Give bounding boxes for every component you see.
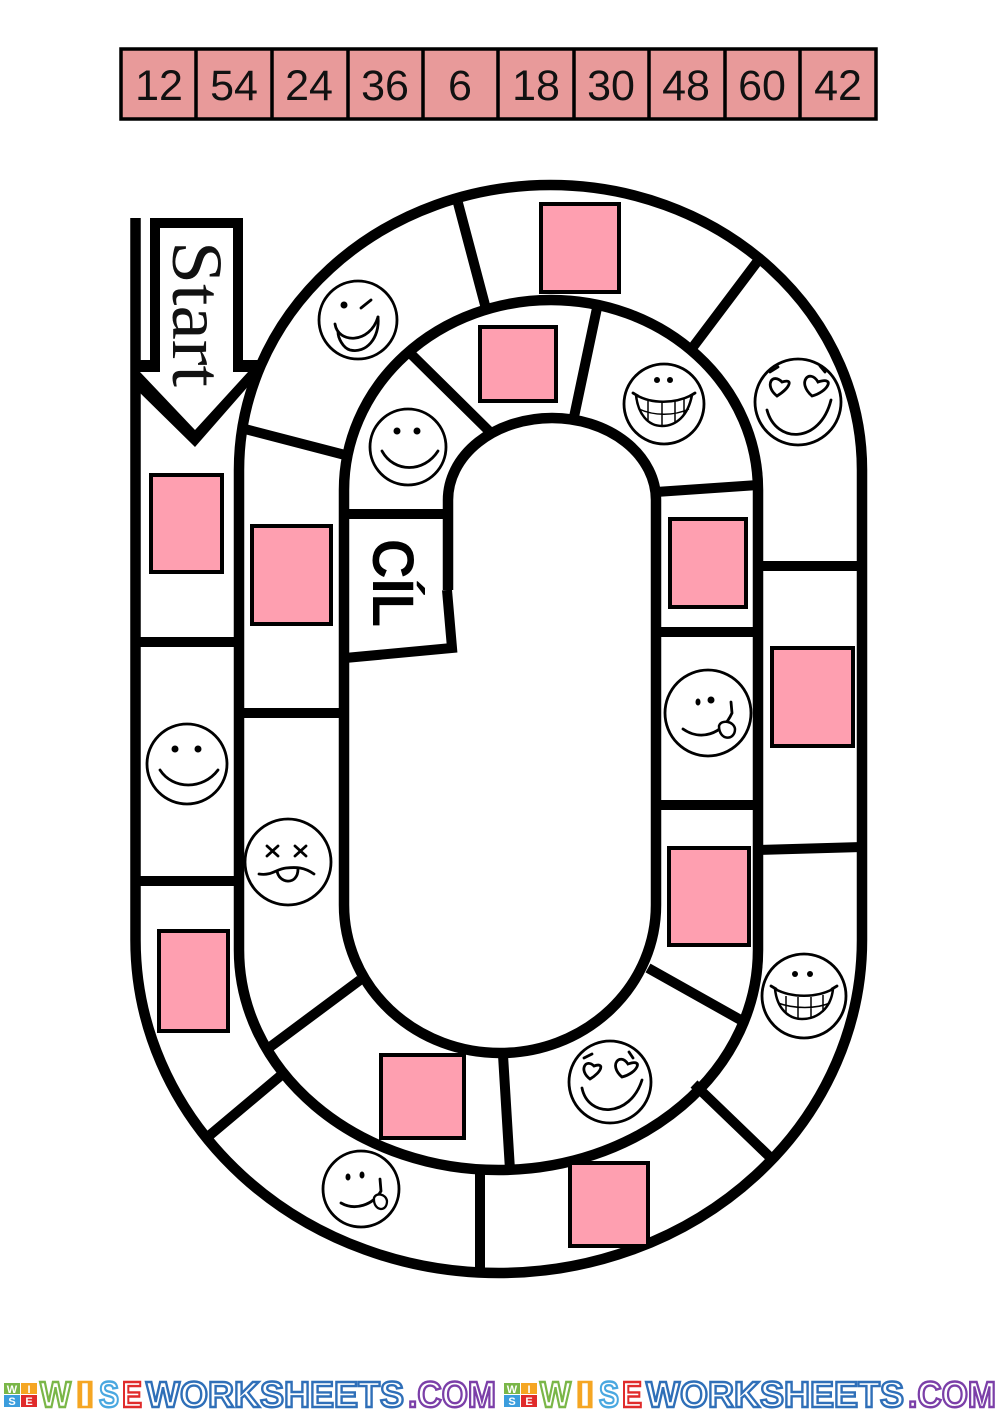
watermark left: W bbox=[7, 1384, 18, 1396]
icon: smiling face bbox=[370, 409, 446, 485]
icon: heart eyes face bottom bbox=[569, 1041, 651, 1123]
watermark right: E bbox=[525, 1396, 533, 1408]
answer square 1 bbox=[151, 475, 222, 572]
icon: tongue out face bbox=[665, 670, 751, 756]
number strip: 6 bbox=[448, 62, 472, 110]
answer square 2 bbox=[252, 526, 331, 624]
watermark right: I bbox=[527, 1384, 531, 1396]
icon: grinning face lower right bbox=[762, 954, 846, 1038]
answer square 4 bbox=[381, 1055, 464, 1138]
icon: tongue out face bottom bbox=[323, 1151, 399, 1227]
answer square 10 bbox=[541, 204, 619, 292]
game track bbox=[136, 185, 862, 1273]
answer square 8 bbox=[670, 519, 746, 607]
answer square 6 bbox=[669, 848, 749, 945]
number strip: 18 bbox=[512, 62, 560, 110]
watermark left: S bbox=[8, 1396, 16, 1408]
watermark right bbox=[504, 1374, 996, 1413]
watermark left: I bbox=[27, 1384, 31, 1396]
start arrow bbox=[135, 218, 262, 447]
watermark left: E bbox=[25, 1396, 33, 1408]
watermark right: S bbox=[508, 1396, 516, 1408]
number strip: 60 bbox=[738, 62, 786, 110]
number strip: 42 bbox=[814, 62, 862, 110]
finish label: CÍL bbox=[360, 539, 425, 627]
answer square 9 bbox=[480, 327, 556, 401]
watermark right: W bbox=[507, 1384, 518, 1396]
answer square 7 bbox=[772, 648, 853, 746]
icon: winking face bbox=[319, 281, 397, 359]
number strip: 24 bbox=[285, 62, 333, 110]
number strip: 48 bbox=[662, 62, 710, 110]
number strip: 12 bbox=[135, 62, 183, 110]
answer square 3 bbox=[159, 931, 228, 1031]
number strip: 36 bbox=[361, 62, 409, 110]
icon: dizzy face bbox=[245, 819, 331, 905]
number strip: 30 bbox=[587, 62, 635, 110]
number strip: 54 bbox=[210, 62, 258, 110]
icon: heart eyes face bbox=[755, 359, 841, 445]
icon: grinning face bbox=[624, 364, 704, 444]
answer square 5 bbox=[570, 1163, 648, 1246]
icon: smiling face left column bbox=[147, 724, 227, 804]
number strip bbox=[121, 49, 876, 119]
start arrow: Start bbox=[157, 241, 237, 387]
watermark left bbox=[4, 1374, 496, 1413]
